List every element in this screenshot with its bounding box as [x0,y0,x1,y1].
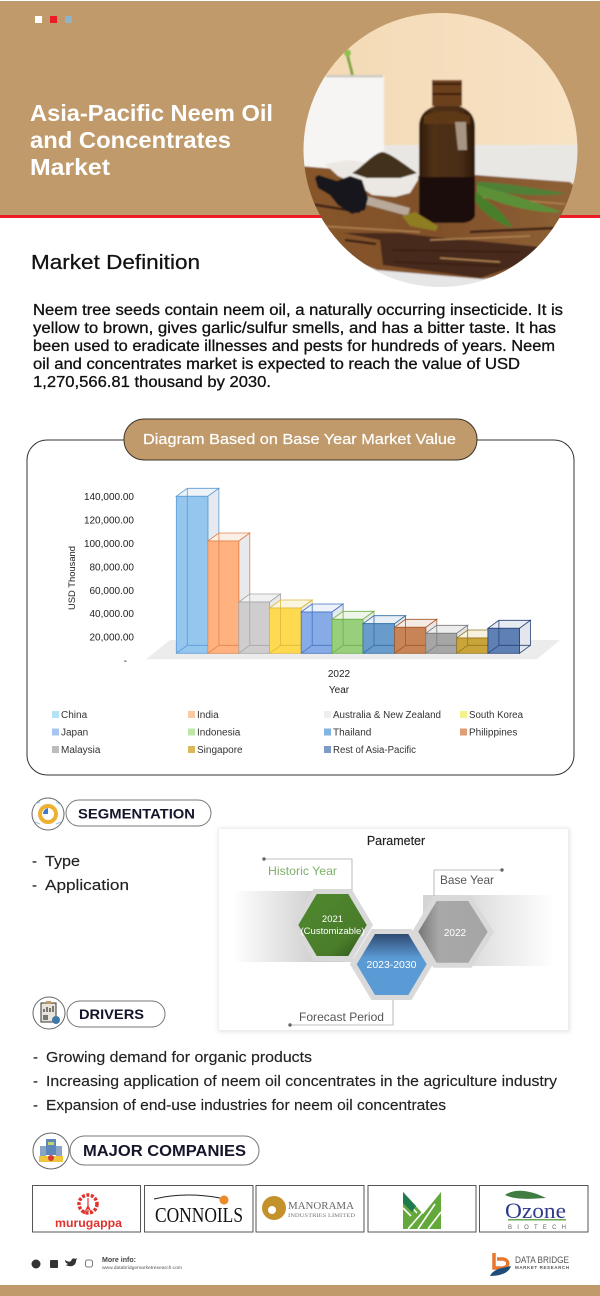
drivers list: - [33,1049,38,1066]
x axis labels [328,669,351,696]
chart legend: Philippines [469,728,517,738]
callout: historic year: Historic Year [268,864,337,878]
y axis labels: 120,000.00 [84,516,134,526]
chart floor [146,640,560,659]
more info text: More info: [102,1255,136,1264]
bar: Rest of Asia-Pacific [488,620,530,653]
logo: Data Bridge Market Research: MARKET RESEARCH [515,1265,569,1270]
ribbon bands [233,891,555,966]
panel: parameter diagram [218,828,570,1032]
drivers list: Increasing application of neem oil concentrates in the agriculture industry [46,1073,558,1090]
drivers list: - [33,1073,38,1090]
chart legend: Indonesia [197,728,241,738]
heading: major companies [70,1136,259,1165]
drivers list [33,1049,558,1114]
logo: Ozone Biotech: Ozone [505,1198,566,1223]
3D bar chart [176,488,531,653]
y axis labels: 140,000.00 [84,492,134,503]
more info text: www.databridgemarketresearch.com [102,1265,182,1270]
callout: forecast period [288,998,393,1027]
parameter heading: Parameter [367,834,425,848]
hexagon: base year 2022: 2022 [444,928,467,939]
heading: drivers [67,1001,165,1027]
icon: drivers [33,997,65,1029]
bar: India [208,533,250,653]
title: Asia-Pacific Neem Oil [30,100,273,126]
logo: green M [368,1186,476,1232]
title: Market [30,154,110,180]
x axis labels: 2022 [328,669,351,680]
bar: China [176,488,219,653]
y axis labels: 60,000.00 [90,586,134,597]
hexagon: historic year 2021: 2021 [322,914,343,925]
y axis labels: 20,000.00 [90,632,134,644]
chart legend: Rest of Asia-Pacific [333,745,416,756]
y axis labels: 100,000.00 [84,539,134,550]
definition paragraph: oil and concentrates market is expected to reach the value of USD [33,356,520,373]
hexagon: forecast period 2023-2030: 2023-2030 [366,960,417,971]
bar: Indonesia [332,611,374,653]
hexagon: base year 2022 [412,896,494,968]
bar: South Korea [270,600,312,653]
chart legend: Australia & New Zealand [333,710,441,721]
logo: Data Bridge Market Research [490,1253,569,1276]
segmentation list: - [32,877,37,894]
chart heading pill: Diagram Based on Base Year Market Value [143,432,456,448]
logo: Manorama Industries: INDUSTRIES LIMITED [288,1213,355,1219]
chart heading pill [124,419,477,460]
definition paragraph [33,302,563,391]
segmentation list: Type [45,853,80,870]
segmentation list: - [32,853,37,870]
social icons [32,1258,92,1268]
drivers list: - [33,1097,38,1114]
y axis labels [84,492,134,667]
title [30,100,273,180]
logo: Manorama Industries: MANORAMA [288,1201,354,1212]
chart legend: South Korea [469,710,523,721]
logo: Ozone Biotech [480,1186,588,1232]
icon: major companies [33,1133,69,1169]
callout: base year: Base Year [440,873,494,887]
logo: murugappa [32,1186,140,1232]
bar: Japan [301,604,343,653]
header band [0,1,600,215]
callout: base year [434,868,504,898]
hexagon: forecast period 2023-2030 [350,929,433,1000]
definition paragraph: yellow to brown, gives garlic/sulfur smells, and has a bitter taste. It has [33,320,556,337]
heading: segmentation: SEGMENTATION [78,806,195,822]
chart legend: Japan [61,728,88,738]
heading: major companies: MAJOR COMPANIES [83,1143,246,1160]
chart legend: Thailand [333,728,371,738]
logo: murugappa: murugappa [55,1218,123,1230]
definition paragraph: 1,270,566.81 thousand by 2030. [33,374,271,391]
logo: Manorama Industries [256,1186,364,1232]
heading: market definition: Market Definition [31,251,200,274]
bar: Singapore [457,630,499,653]
y axis labels: 80,000.00 [90,562,134,574]
definition paragraph: Neem tree seeds contain neem oil, a naturally occurring insecticide. It is [33,302,563,319]
drivers list: Expansion of end-use industries for neem oil concentrates [46,1097,446,1114]
callout: forecast period: Forecast Period [299,1010,384,1024]
red header rule [0,215,600,218]
logo: Ozone Biotech: BIOTECH [508,1225,566,1231]
three decorative squares [35,16,72,23]
chart legend [52,710,523,756]
bar: Philippines [395,619,437,653]
segmentation list: Application [45,877,129,894]
logo: ConnOils [144,1186,253,1232]
logo: ConnOils: CONNOILS [155,1203,243,1227]
chart legend: Malaysia [61,745,101,756]
icon: segmentation [32,798,64,830]
footer band [0,1285,600,1296]
y axis title: USD Thousand [67,546,78,610]
segmentation list [32,853,129,894]
definition paragraph: been used to eradicate illnesses and pests for hundreds of years. Neem [33,338,555,355]
hexagon: historic year 2021: (Customizable) [300,926,364,936]
hexagon: historic year 2021 [292,889,373,961]
panel: market value chart [27,419,574,775]
bar: Thailand [363,616,406,653]
callout: historic year [262,857,352,892]
logo: Data Bridge Market Research: DATA BRIDGE [515,1255,569,1265]
more info text [102,1255,182,1270]
chart legend: Singapore [197,745,243,756]
x axis labels: Year [329,685,350,696]
title: and Concentrates [30,127,231,153]
photo: neem oil bottle on wooden board [300,10,580,292]
chart legend: India [197,710,219,721]
chart legend: China [61,710,88,721]
heading: segmentation [66,800,211,826]
y axis labels: 40,000.00 [90,609,134,620]
heading: drivers: DRIVERS [79,1006,144,1022]
bar: Australia & New Zealand [239,594,281,653]
bar: Malaysia [426,625,468,653]
drivers list: Growing demand for organic products [46,1049,312,1066]
y axis labels: - [124,656,127,667]
